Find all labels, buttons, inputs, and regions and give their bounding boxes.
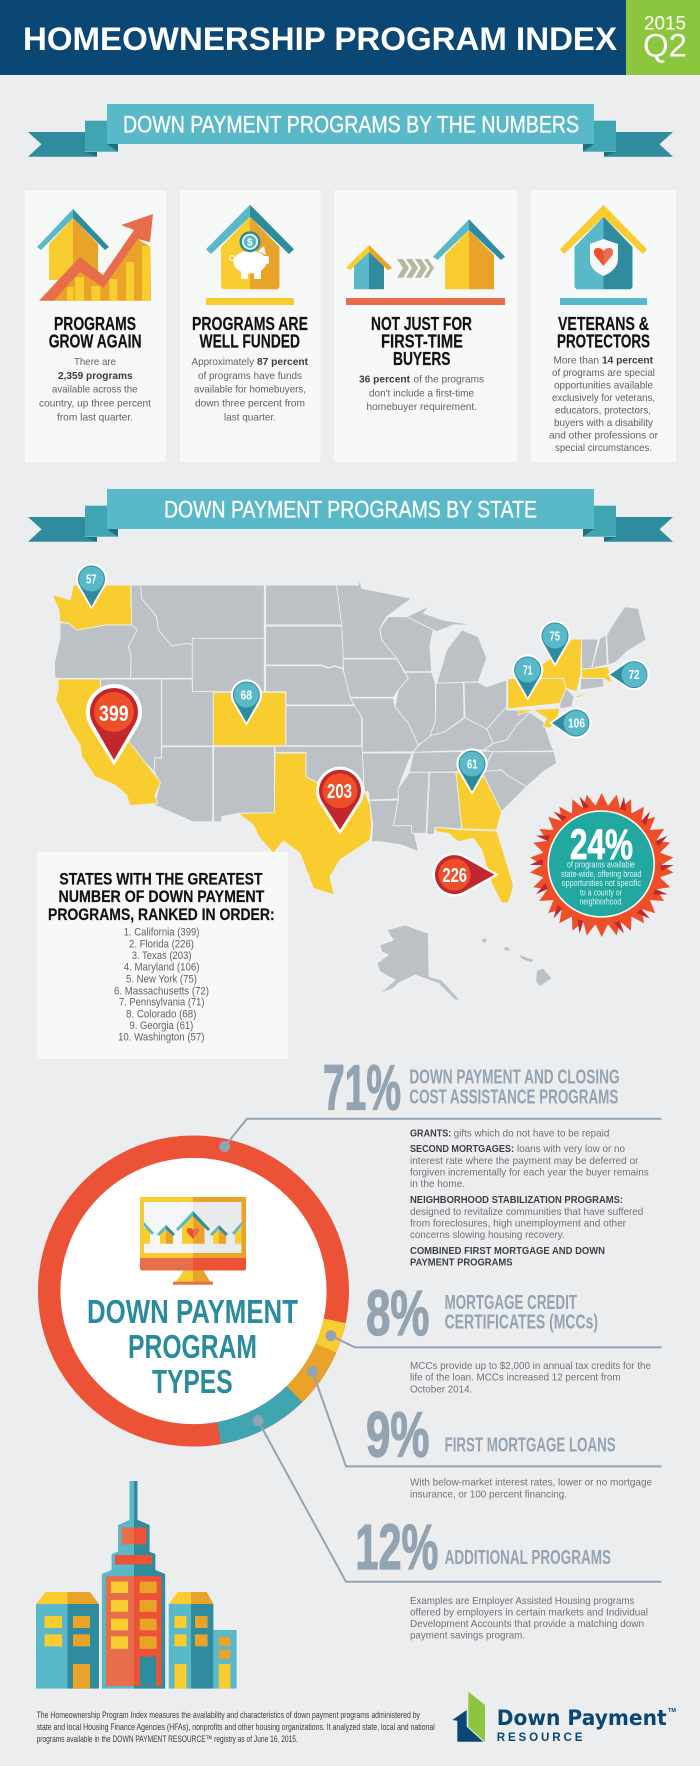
- pin: Georgia 61: 61: [467, 756, 478, 772]
- ribbon heading: by state: [28, 489, 673, 542]
- ribbon heading: by state: DOWN PAYMENT PROGRAMS BY STATE: [164, 496, 537, 524]
- body text: down three percent from: [195, 398, 305, 410]
- body text: special circumstances.: [555, 442, 652, 454]
- pin: Maryland 106: [549, 707, 592, 739]
- pin: New York 75: 75: [550, 628, 560, 644]
- footnote: programs available in the DOWN PAYMENT RESOURCE™ registry as of June 16, 2015.: [37, 1734, 298, 1745]
- body text: and other professions or: [549, 429, 658, 441]
- description: Examples are Employer Assisted Housing programs: [410, 1596, 634, 1607]
- ranked list: [114, 927, 209, 1044]
- description: [410, 1477, 652, 1500]
- icon: small house to big house: [346, 219, 505, 305]
- body text: buyers with a disability: [554, 417, 654, 429]
- heading: [557, 313, 650, 351]
- heading: GROW AGAIN: [49, 330, 142, 351]
- logo: Down Payment Resource: [452, 1692, 676, 1744]
- description: in the home.: [410, 1179, 465, 1190]
- pin: Pennsylvania 71: [512, 654, 543, 701]
- description: loans with very low or no: [517, 1144, 625, 1155]
- stat: 12%: [355, 1511, 438, 1583]
- description: [410, 1596, 648, 1642]
- body text: [549, 355, 658, 454]
- heading: VETERANS &: [558, 313, 649, 334]
- panel: veterans and protectors: [531, 190, 676, 462]
- icon: house with rising arrow: [37, 209, 153, 301]
- body text: More than: [554, 355, 599, 367]
- heading: [371, 313, 472, 369]
- section: 71 percent: [219, 1051, 662, 1268]
- panel: not just for first-time buyers: [334, 190, 517, 462]
- description: designed to revitalize communities that have suffered: [410, 1207, 644, 1218]
- callout: 24 percent starburst: neighborhood.: [580, 896, 623, 906]
- icon: house with shield: [560, 205, 647, 305]
- title: HOMEOWNERSHIP PROGRAM INDEX: [23, 21, 617, 57]
- callout: 24 percent starburst: to a county or: [580, 887, 622, 897]
- ranked list: 8. Colorado (68): [126, 1008, 196, 1020]
- description: forgiven incrementally for each year the buyer remains: [410, 1168, 649, 1179]
- description: [410, 1128, 649, 1268]
- donut title: TYPES: [152, 1363, 233, 1400]
- body text: of programs have funds: [198, 370, 302, 382]
- donut title: DOWN PAYMENT: [87, 1293, 298, 1330]
- description: PAYMENT PROGRAMS: [410, 1258, 513, 1268]
- description: COMBINED FIRST MORTGAGE AND DOWN: [410, 1246, 605, 1257]
- callout: 24 percent starburst: 24%: [570, 821, 633, 869]
- pin: Georgia 61: [456, 748, 488, 795]
- pin: Pennsylvania 71: 71: [523, 662, 532, 678]
- heading: BUYERS: [393, 348, 450, 369]
- pin: Florida 226: 226: [442, 865, 467, 887]
- callout: 24 percent starburst: of programs available: [567, 860, 635, 870]
- section: 12 percent: [252, 1415, 662, 1642]
- icon: city buildings: [36, 1481, 237, 1689]
- ranked list: 4. Maryland (106): [124, 962, 200, 974]
- pin: Massachusetts 72: [607, 659, 650, 690]
- list heading: NUMBER OF DOWN PAYMENT: [58, 887, 265, 906]
- ranked list: 5. New York (75): [126, 974, 197, 986]
- callout: 24 percent starburst: opportunities not specific: [562, 878, 641, 888]
- connector: [331, 1336, 662, 1347]
- body text: 36 percent: [359, 374, 410, 386]
- description: gifts which do not have to be repaid: [454, 1128, 610, 1139]
- body text: from last quarter.: [57, 412, 133, 424]
- description: SECOND MORTGAGES:: [410, 1144, 514, 1155]
- pin: Florida 226: [432, 853, 499, 897]
- list heading: STATES WITH THE GREATEST: [59, 869, 263, 888]
- stat: 9%: [366, 1399, 430, 1471]
- body text: country, up three percent: [39, 398, 151, 410]
- left building: [36, 1592, 99, 1689]
- list heading: PROGRAMS, RANKED IN ORDER:: [48, 905, 275, 924]
- logo: Down Payment Resource: Down Payment: [497, 1706, 667, 1730]
- list heading: [48, 869, 275, 924]
- ranked list: 7. Pennsylvania (71): [119, 997, 204, 1009]
- logo: Down Payment Resource: TM: [668, 1708, 676, 1714]
- pin: Washington 57: 57: [86, 572, 96, 587]
- connector: [258, 1421, 662, 1582]
- stat label: CERTIFICATES (MCCs): [445, 1311, 598, 1333]
- icon: logo house: [452, 1692, 485, 1742]
- donut title: PROGRAM: [128, 1328, 257, 1365]
- body text: Approximately: [192, 356, 255, 368]
- US map: [52, 580, 646, 1000]
- description: NEIGHBORHOOD STABILIZATION PROGRAMS:: [410, 1195, 623, 1206]
- pin: Washington 57: [76, 563, 107, 610]
- footnote: The Homeownership Program Index measures the availability and characteristics of down payment programs administered by: [37, 1710, 420, 1721]
- stat label: FIRST MORTGAGE LOANS: [445, 1435, 616, 1457]
- body text: 14 percent: [602, 355, 653, 367]
- ranked list: 3. Texas (203): [132, 950, 192, 962]
- pin: California 399: [86, 684, 142, 766]
- body text: educators, protectors,: [555, 404, 651, 416]
- body text: available for homebuyers,: [194, 384, 306, 396]
- section: 8 percent: [326, 1277, 662, 1395]
- heading: PROTECTORS: [557, 330, 650, 351]
- callout: 24 percent starburst: state-wide, offering broad: [561, 869, 642, 879]
- body text: [192, 356, 308, 424]
- stat: 71%: [323, 1051, 401, 1123]
- pin: Massachusetts 72: 72: [629, 667, 640, 682]
- connector: [312, 1372, 662, 1466]
- panel: ranked states list: [37, 852, 288, 1059]
- body text: There are: [74, 356, 116, 368]
- ranked list: 2. Florida (226): [129, 938, 194, 950]
- body text: opportunities available: [554, 380, 653, 392]
- icon: monitor with houses: [140, 1197, 246, 1285]
- footnote: state and local Housing Finance Agencies (HFAs), nonprofits and other housing organizations. It analyzed state, local and national: [37, 1722, 435, 1733]
- pin: Texas 203: [316, 767, 364, 835]
- body text: 2,359 programs: [58, 370, 133, 382]
- body text: [39, 356, 151, 424]
- description: October 2014.: [410, 1384, 472, 1395]
- ribbon heading: by the numbers: DOWN PAYMENT PROGRAMS BY THE NUMBERS: [123, 112, 579, 139]
- heading: FIRST-TIME: [381, 330, 463, 351]
- donut chart: program types: [49, 1147, 338, 1435]
- right building: [169, 1592, 237, 1689]
- stat: 8%: [366, 1277, 430, 1349]
- stat label: ADDITIONAL PROGRAMS: [445, 1547, 611, 1569]
- heading: PROGRAMS: [54, 313, 136, 334]
- stat label: [409, 1066, 620, 1108]
- body text: [359, 374, 484, 413]
- body text: homebuyer requirement.: [366, 401, 477, 413]
- connector: [225, 1119, 662, 1146]
- quarter badge: Q2: [643, 28, 687, 64]
- description: GRANTS:: [410, 1128, 451, 1139]
- description: With below-market interest rates, lower or no mortgage: [410, 1477, 652, 1488]
- ranked list: 6. Massachusetts (72): [114, 985, 209, 997]
- heading: WELL FUNDED: [200, 330, 300, 351]
- heading: PROGRAMS ARE: [192, 313, 308, 334]
- panel: programs grow again: [25, 190, 166, 462]
- quarter badge: 2015: [644, 13, 686, 34]
- stat label: MORTGAGE CREDIT: [445, 1292, 577, 1314]
- description: offered by employers in certain markets and Individual: [410, 1608, 648, 1618]
- pin: Maryland 106: 106: [568, 716, 585, 730]
- description: life of the loan. MCCs increased 12 percent from: [410, 1373, 620, 1384]
- description: MCCs provide up to $2,000 in annual tax credits for the: [410, 1361, 651, 1372]
- ranked list: 10. Washington (57): [118, 1032, 204, 1044]
- pin: Texas 203: 203: [327, 781, 352, 803]
- centre tower: [102, 1481, 165, 1689]
- body text: last quarter.: [224, 412, 276, 424]
- ribbon heading: by the numbers: [28, 104, 673, 157]
- heading: [49, 313, 142, 351]
- icon: house with piggy bank: [206, 205, 294, 305]
- callout: 24 percent starburst: [529, 793, 674, 937]
- stat label: [445, 1292, 598, 1333]
- body text: exclusively for veterans,: [552, 392, 655, 404]
- pin: New York 75: [539, 620, 571, 667]
- section: 9 percent: [307, 1366, 662, 1500]
- description: interest rate where the payment may be deferred or: [410, 1156, 639, 1167]
- footnote: [37, 1710, 435, 1745]
- pin: Colorado 68: 68: [240, 688, 252, 703]
- description: from foreclosures, high unemployment and other: [410, 1219, 627, 1230]
- ranked list: 1. California (399): [124, 927, 200, 939]
- heading: NOT JUST FOR: [371, 313, 472, 334]
- description: insurance, or 100 percent financing.: [410, 1489, 567, 1500]
- quarter badge: [626, 0, 700, 75]
- description: payment savings program.: [410, 1631, 525, 1642]
- body text: 87 percent: [257, 356, 308, 368]
- pin: California 399: 399: [99, 701, 129, 726]
- logo: Down Payment Resource: RESOURCE: [497, 1731, 584, 1744]
- body text: don't include a first-time: [369, 387, 474, 399]
- panel: programs are well funded: [180, 190, 320, 462]
- description: [410, 1361, 651, 1395]
- body text: of programs are special: [552, 367, 655, 379]
- pin: Colorado 68: [231, 679, 262, 726]
- body text: of the programs: [414, 374, 484, 386]
- description: concerns slowing housing recovery.: [410, 1230, 565, 1241]
- ranked list: 9. Georgia (61): [130, 1020, 193, 1032]
- header banner: [0, 0, 700, 75]
- body text: available across the: [52, 384, 138, 396]
- heading: [192, 313, 308, 351]
- donut title: [87, 1293, 298, 1400]
- icon: house with piggy bank: $: [247, 238, 253, 248]
- description: Development Accounts that provide a matching down: [410, 1619, 644, 1630]
